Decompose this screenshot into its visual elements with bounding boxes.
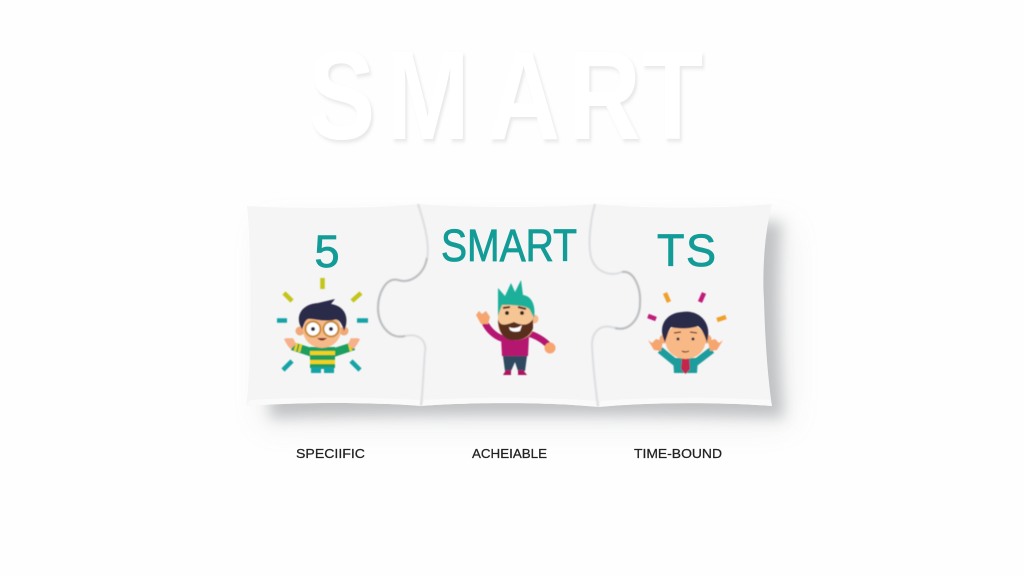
seam shading between pieces — [378, 204, 640, 407]
icon: bearded man — [476, 280, 556, 375]
panel: puzzle piece 2 — [378, 204, 640, 407]
heading: 5: 5 — [314, 226, 340, 277]
icon: orange and magenta rays — [648, 293, 726, 320]
icon: boy with glasses — [284, 299, 360, 373]
panel: puzzle piece 1 — [246, 204, 428, 406]
label: time-bound: TIME-BOUND — [634, 446, 722, 461]
panel: puzzle piece 3 — [590, 204, 772, 407]
label: specific: SPECIIFIC — [296, 446, 365, 461]
heading: SMART: SMART — [441, 220, 577, 271]
icon: yellow and teal rays — [277, 278, 368, 370]
title: embossed SMART: SMART — [308, 26, 703, 167]
label: achievable: ACHEIABLE — [472, 446, 547, 461]
puzzle shadow — [262, 222, 790, 425]
heading: TS: TS — [657, 225, 716, 276]
icon: man with raised hands — [648, 312, 723, 374]
